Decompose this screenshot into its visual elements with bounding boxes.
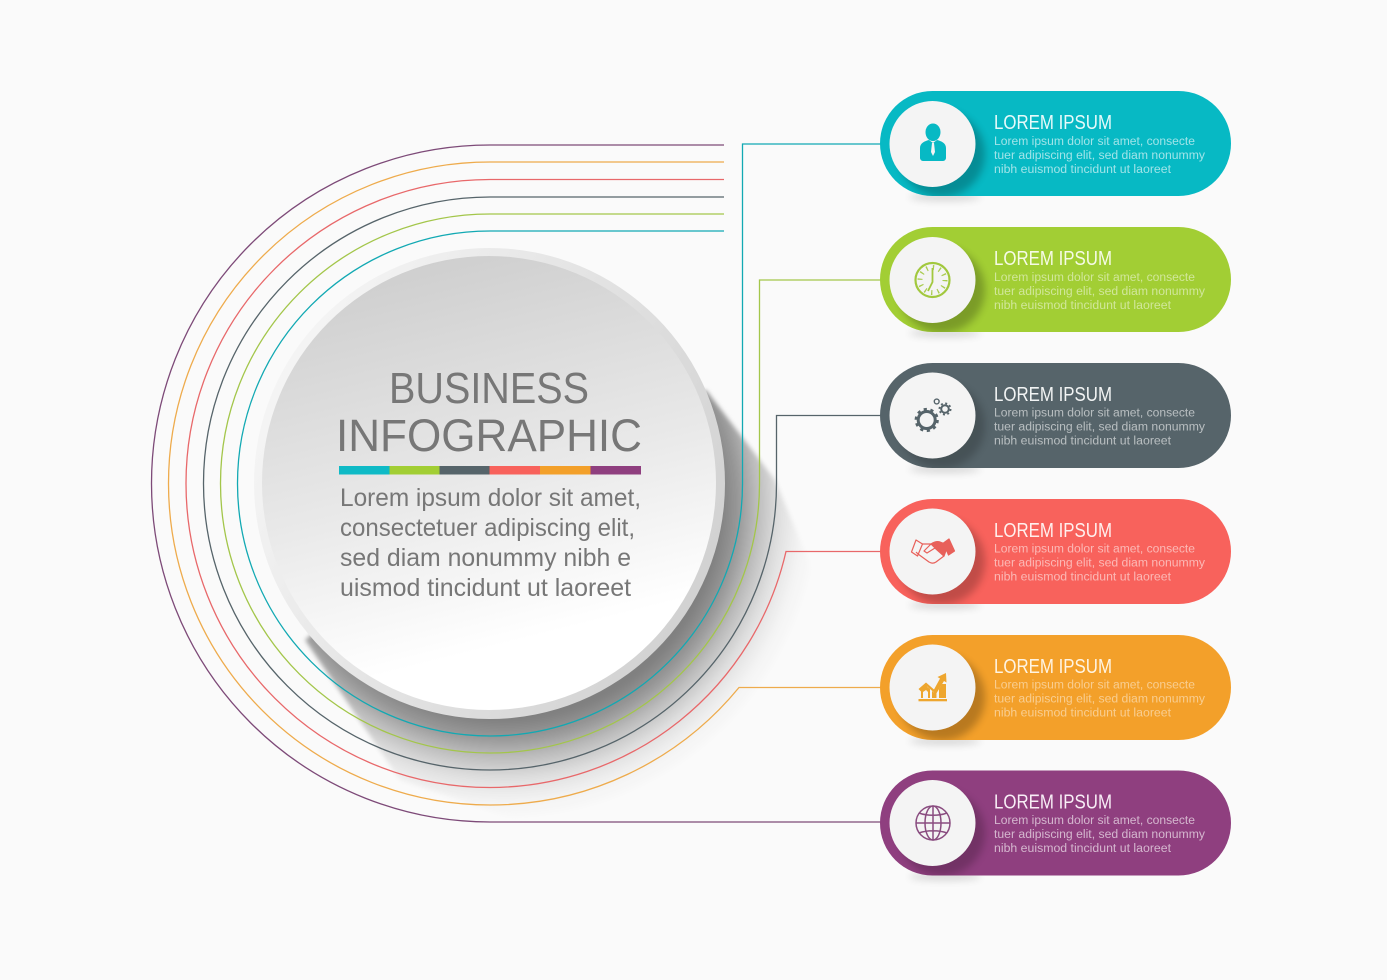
central description: consectetuer adipiscing elit, — [340, 514, 635, 542]
body text — [994, 408, 1205, 448]
heading: LOREM IPSUM — [994, 384, 1112, 406]
line: green — [221, 214, 882, 753]
title — [336, 364, 642, 461]
central description — [340, 484, 641, 602]
body text: tuer adipiscing elit, sed diam nonummy — [994, 286, 1205, 298]
title: INFOGRAPHIC — [336, 410, 642, 461]
icon: clock — [916, 263, 950, 297]
body text — [994, 544, 1205, 584]
central description: sed diam nonummy nibh e — [340, 544, 631, 572]
body text: Lorem ipsum dolor sit amet, consecte — [994, 544, 1195, 556]
icon: handshake — [912, 539, 954, 563]
body text: nibh euismod tincidunt ut laoreet — [994, 843, 1172, 855]
panel: item 5 orange — [880, 635, 1231, 745]
line: purple — [151, 145, 882, 822]
line: orange — [169, 162, 882, 805]
central circle shadow — [305, 390, 825, 835]
body text: nibh euismod tincidunt ut laoreet — [994, 300, 1172, 312]
panel: item 2 green — [880, 227, 1231, 337]
heading: LOREM IPSUM — [994, 656, 1112, 678]
panel: item 6 purple — [880, 770, 1231, 880]
body text: Lorem ipsum dolor sit amet, consecte — [994, 272, 1195, 284]
central description: uismod tincidunt ut laoreet — [340, 574, 631, 602]
central circle — [254, 248, 725, 719]
body text: Lorem ipsum dolor sit amet, consecte — [994, 136, 1195, 148]
panel: item 1 teal — [880, 91, 1231, 201]
body text: nibh euismod tincidunt ut laoreet — [994, 164, 1172, 176]
colour bar — [339, 466, 641, 474]
panel: item 3 slate — [880, 363, 1231, 473]
line: red — [186, 180, 882, 788]
icon: rising chart — [918, 673, 947, 701]
body text: tuer adipiscing elit, sed diam nonummy — [994, 694, 1205, 706]
connector lines — [151, 144, 882, 822]
body text: tuer adipiscing elit, sed diam nonummy — [994, 150, 1205, 162]
body text: tuer adipiscing elit, sed diam nonummy — [994, 558, 1205, 570]
heading: LOREM IPSUM — [994, 248, 1112, 270]
title: BUSINESS — [389, 364, 589, 413]
body text: Lorem ipsum dolor sit amet, consecte — [994, 408, 1195, 420]
line: slate — [204, 197, 882, 770]
body text: nibh euismod tincidunt ut laoreet — [994, 708, 1172, 720]
line: teal — [238, 144, 882, 736]
body text: nibh euismod tincidunt ut laoreet — [994, 436, 1172, 448]
heading: LOREM IPSUM — [994, 520, 1112, 542]
body text: Lorem ipsum dolor sit amet, consecte — [994, 815, 1195, 827]
icon: businessman — [920, 124, 946, 161]
icon: globe — [916, 806, 950, 840]
body text — [994, 815, 1205, 855]
icon: gears — [916, 399, 951, 431]
body text: nibh euismod tincidunt ut laoreet — [994, 572, 1172, 584]
heading: LOREM IPSUM — [994, 112, 1112, 134]
heading: LOREM IPSUM — [994, 792, 1112, 814]
body text — [994, 680, 1205, 720]
body text: tuer adipiscing elit, sed diam nonummy — [994, 829, 1205, 841]
body text — [994, 272, 1205, 312]
body text: tuer adipiscing elit, sed diam nonummy — [994, 422, 1205, 434]
body text: Lorem ipsum dolor sit amet, consecte — [994, 680, 1195, 692]
central description: Lorem ipsum dolor sit amet, — [340, 484, 641, 512]
panel: item 4 red — [880, 499, 1231, 609]
body text — [994, 136, 1205, 176]
